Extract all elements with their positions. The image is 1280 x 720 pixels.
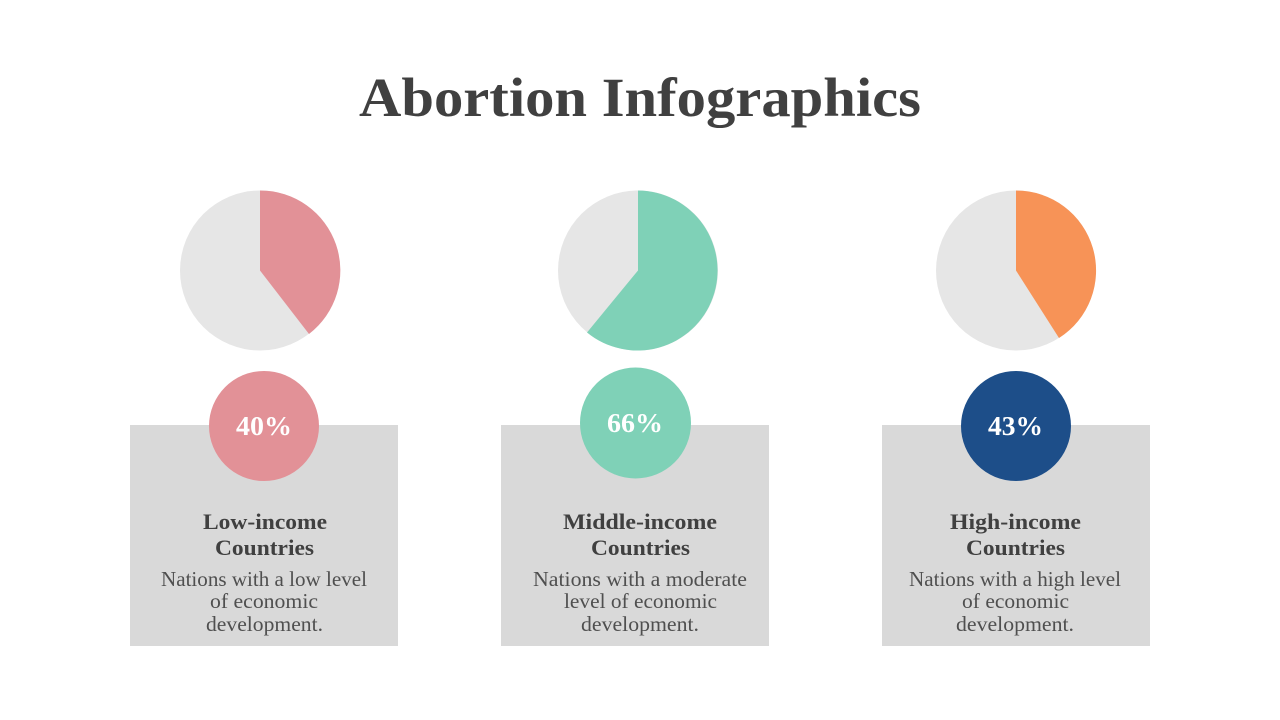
heading: middle-income countries — [563, 509, 717, 560]
description: high-income: development. — [956, 612, 1074, 636]
description: middle-income: Nations with a moderate — [533, 567, 747, 591]
description: high-income — [909, 567, 1121, 636]
card: high-income — [882, 425, 1150, 646]
pie chart: low-income — [180, 190, 340, 350]
description: middle-income: level of economic — [564, 589, 717, 613]
description: low-income: of economic — [210, 589, 318, 613]
badge: 40%: 40% — [236, 411, 292, 441]
badge: 43% — [961, 371, 1071, 481]
panel: middle-income countries — [501, 190, 769, 646]
panel: high-income countries — [882, 190, 1150, 646]
card: low-income — [130, 425, 398, 646]
description: high-income: Nations with a high level — [909, 567, 1121, 591]
heading: high-income countries — [950, 509, 1081, 560]
badge: 40% — [209, 371, 319, 481]
card: middle-income — [501, 425, 769, 646]
heading: low-income countries: Countries — [215, 535, 314, 560]
heading: low-income countries — [203, 509, 327, 560]
heading: middle-income countries: Middle-income — [563, 509, 717, 534]
description: middle-income: development. — [581, 612, 699, 636]
pie chart: middle-income — [558, 190, 718, 350]
badge: 66%: 66% — [607, 408, 663, 438]
heading: low-income countries: Low-income — [203, 509, 327, 534]
pie chart: high-income — [936, 190, 1096, 350]
title: Abortion Infographics — [359, 67, 921, 128]
description: low-income: Nations with a low level — [161, 567, 367, 591]
description: high-income: of economic — [962, 589, 1069, 613]
panel: low-income countries — [130, 190, 398, 646]
description: middle-income — [533, 567, 747, 636]
heading: high-income countries: High-income — [950, 509, 1081, 534]
heading: high-income countries: Countries — [966, 535, 1065, 560]
description: low-income: development. — [206, 612, 323, 636]
badge: 43%: 43% — [988, 411, 1043, 441]
description: low-income — [161, 567, 367, 636]
badge: 66% — [580, 368, 691, 478]
heading: middle-income countries: Countries — [591, 535, 690, 560]
